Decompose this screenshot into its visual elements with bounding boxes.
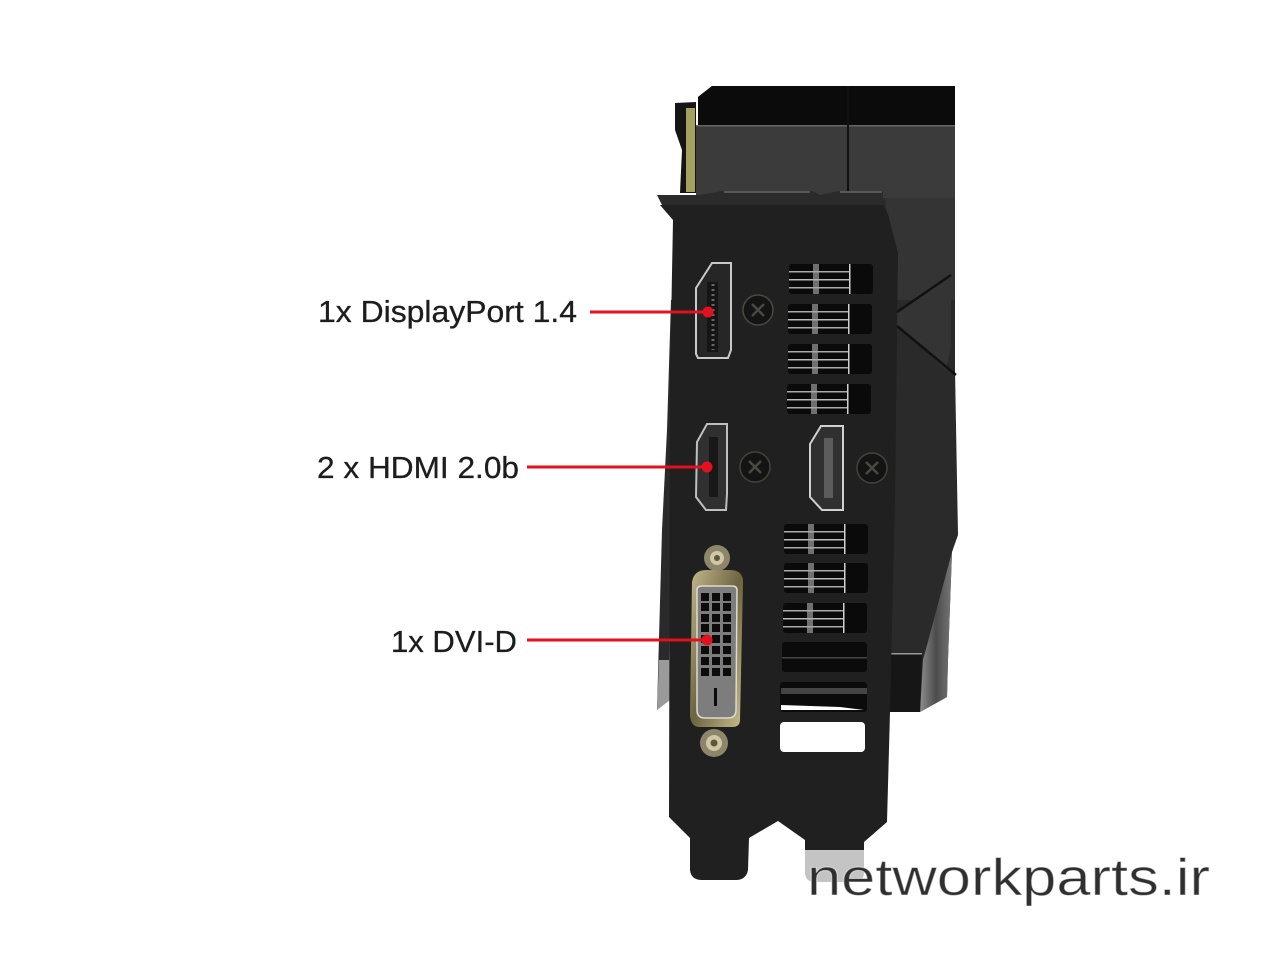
label: HDMI: 2 x HDMI 2.0b <box>317 450 519 485</box>
screw: DisplayPort <box>743 295 773 325</box>
port: DVI-D connector <box>690 545 743 757</box>
screw: HDMI right <box>857 453 887 483</box>
pointer: HDMI <box>527 462 712 472</box>
DVI bottom nut <box>700 729 728 757</box>
cooler body <box>696 86 958 712</box>
label: HDMI <box>317 450 712 485</box>
label: DVI-D <box>391 624 712 659</box>
vent slots lower <box>780 524 868 712</box>
cooler upper right panel <box>885 198 955 300</box>
DVI top nut <box>704 545 730 571</box>
cooler textured side panel <box>696 126 955 198</box>
cooler top black shroud <box>698 86 955 126</box>
port: DisplayPort <box>696 263 731 358</box>
circuit board edge with gold fingers <box>675 102 696 193</box>
pointer: DVI-D <box>527 634 712 646</box>
DVI metal frame <box>690 570 743 727</box>
port: HDMI right <box>810 426 843 510</box>
port: HDMI left <box>696 424 727 510</box>
label: DisplayPort <box>318 294 714 329</box>
pointer: DisplayPort <box>590 306 714 318</box>
white window slot <box>780 722 865 752</box>
DVI pin holes <box>701 593 731 706</box>
label: DVI-D: 1x DVI-D <box>391 624 517 659</box>
bracket grey faded tab <box>805 850 864 882</box>
left side rail <box>657 300 672 710</box>
bracket top flange <box>657 191 883 205</box>
cooler bright lower edge <box>920 552 952 712</box>
cooler triangle facet <box>897 275 951 370</box>
label: DisplayPort: 1x DisplayPort 1.4 <box>318 294 577 329</box>
watermark: networkparts.ir <box>807 849 1210 907</box>
vent slots upper <box>787 264 873 414</box>
metal bracket <box>660 205 898 880</box>
screw: HDMI left <box>740 452 770 482</box>
